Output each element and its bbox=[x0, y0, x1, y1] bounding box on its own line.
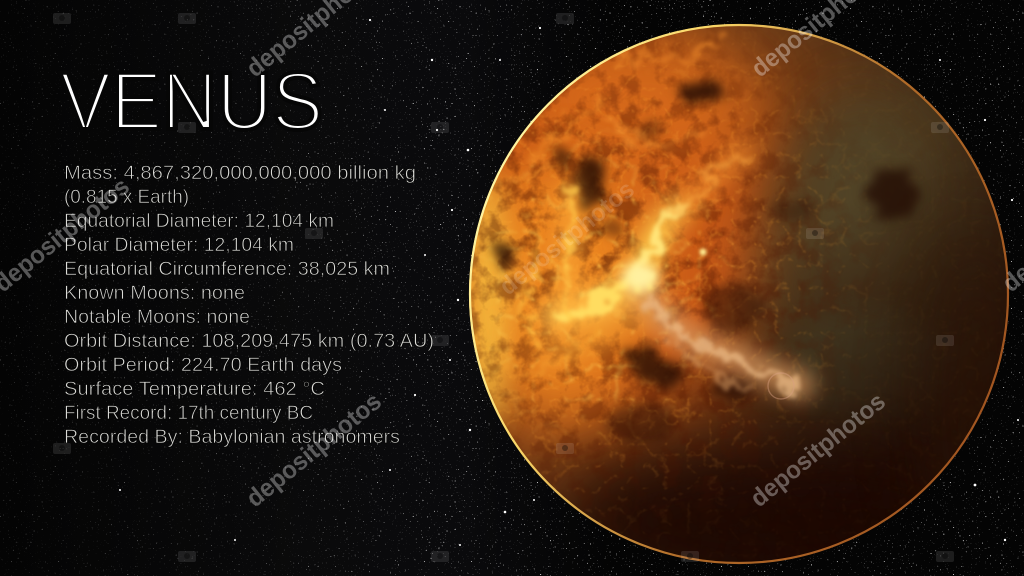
planet lit rim bbox=[470, 25, 1008, 563]
watermarks: depositphotos bbox=[494, 175, 640, 301]
fact: circumference: Equatorial Circumference: 38,025 km bbox=[64, 259, 390, 280]
surface texture bbox=[471, 34, 874, 538]
watermarks: depositphotos bbox=[241, 387, 387, 513]
fact: orbit period: Orbit Period: 224.70 Earth days bbox=[64, 355, 342, 376]
facts list bbox=[64, 163, 434, 448]
fact: equatorial diameter: Equatorial Diameter: 12,104 km bbox=[64, 211, 334, 232]
lava hot core bbox=[622, 248, 794, 399]
fact: known moons: Known Moons: none bbox=[64, 283, 245, 304]
yellow hot veins bbox=[490, 140, 737, 434]
surface tone: hot orange highlands bbox=[468, 35, 760, 430]
watermarks: depositphotos bbox=[745, 387, 891, 513]
surface tone: olive shadow region bbox=[536, 82, 1009, 563]
bright lava flows bbox=[510, 45, 800, 385]
fact: orbit distance: Orbit Distance: 108,209,475 km (0.73 AU) bbox=[64, 331, 434, 352]
fact: notable moons: Notable Moons: none bbox=[64, 307, 250, 328]
fact: surface temperature: Surface Temperature: 462 °C bbox=[64, 379, 325, 400]
fact: recorded by: Recorded By: Babylonian astronomers bbox=[64, 427, 400, 448]
fact: polar diameter: Polar Diameter: 12,104 km bbox=[64, 235, 294, 256]
fact: first record: First Record: 17th century BC bbox=[64, 403, 313, 424]
fact: mass: Mass: 4,867,320,000,000,000 billion kg bbox=[64, 163, 416, 184]
planet: Venus bbox=[460, 15, 1024, 576]
title: VENUS bbox=[60, 56, 323, 147]
fact: mass ratio: (0.815 x Earth) bbox=[64, 187, 189, 208]
dark volcanic patches bbox=[497, 80, 917, 445]
lava glow bbox=[545, 150, 800, 385]
